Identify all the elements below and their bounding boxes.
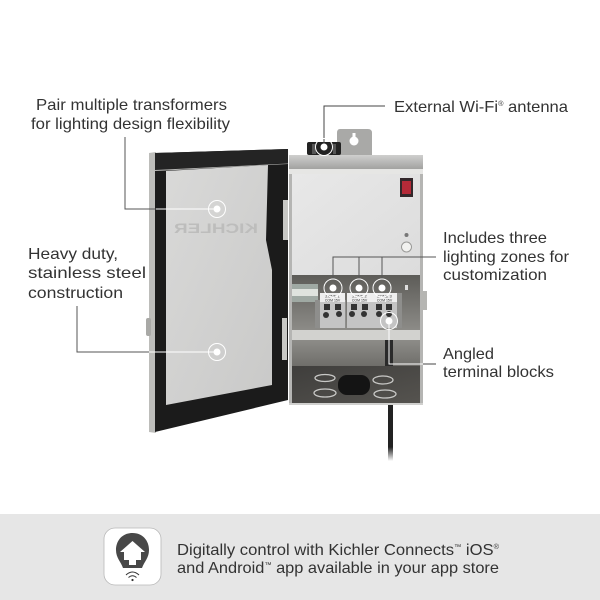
terminal block zone 1: ZONE 1	[325, 294, 340, 298]
bottom tray with knockouts	[289, 366, 423, 405]
terminal block zone 3	[372, 293, 402, 328]
terminal compartment	[292, 275, 420, 366]
icon: app home with wi-fi	[104, 528, 161, 585]
terminal block zone 2: COM 15V	[352, 298, 368, 302]
callout: wi-fi antenna: antenna	[503, 99, 568, 116]
footer text: ™	[264, 562, 272, 569]
callout: design flexibility: Pair multiple transformers	[36, 97, 227, 114]
callout: stainless steel: construction	[28, 285, 123, 302]
callout: three lighting zones: Includes three	[443, 230, 547, 247]
terminal block zone 2: ZONE 2	[352, 294, 367, 298]
footer text: Digitally control with Kichler Connects	[177, 542, 444, 559]
callout: angled terminal blocks: Angled	[443, 346, 494, 363]
terminal block zone 3: COM 15V	[377, 298, 393, 302]
housing body	[289, 155, 423, 405]
terminal block zone 2	[347, 293, 372, 328]
callout: wi-fi antenna: External Wi-Fi	[394, 99, 494, 116]
footer text: ™	[454, 544, 461, 551]
callout: angled terminal blocks: terminal blocks	[443, 364, 554, 381]
door	[146, 149, 288, 433]
callout: design flexibility	[31, 97, 230, 218]
callout: three lighting zones: lighting zones for	[443, 249, 570, 266]
callout: three lighting zones	[324, 230, 570, 297]
footer text: app available in your app store	[272, 560, 499, 577]
terminal block zone 1: COM 15V	[325, 298, 341, 302]
footer text: ®	[494, 543, 500, 551]
callout: stainless steel	[28, 246, 226, 360]
footer text: and Android	[177, 560, 262, 577]
mounting bracket	[337, 129, 372, 155]
product: transformer with open door	[146, 129, 427, 461]
callout: wi-fi antenna: ®	[498, 100, 504, 108]
callout: stainless steel: Heavy duty,	[28, 246, 118, 263]
callout: stainless steel: stainless steel	[28, 265, 146, 282]
power cord	[388, 405, 393, 461]
antenna	[307, 142, 341, 155]
power switch	[400, 178, 413, 197]
callout: angled terminal blocks	[380, 312, 554, 381]
footer band	[0, 514, 600, 600]
callout: wi-fi antenna	[316, 99, 568, 156]
inner control panel	[292, 174, 420, 275]
footer text: iOS	[461, 542, 494, 559]
side latch	[421, 291, 427, 310]
footer text	[177, 542, 500, 577]
callout: design flexibility: for lighting design flexibility	[31, 116, 230, 133]
terminal block zone 3: ZONE 3	[377, 294, 392, 298]
door: KICHLER	[174, 220, 258, 236]
indicator light and button	[402, 233, 412, 252]
terminal block zone 1	[315, 293, 346, 328]
callout: three lighting zones: customization	[443, 267, 547, 284]
